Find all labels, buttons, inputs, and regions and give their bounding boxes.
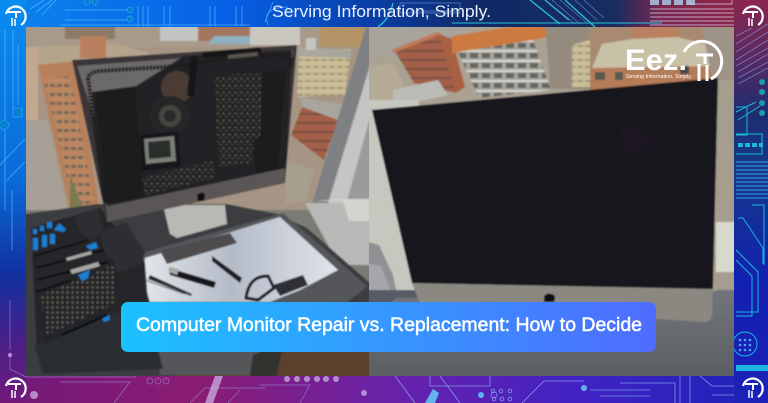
brand logo: Eez: Eez. [625,44,687,77]
corner logo: bottom left [6,379,26,398]
brand logo: Eez: Serving Information, Simply. [626,74,692,80]
photo: front of monitor with black screen [360,20,742,384]
title banner [121,302,656,352]
title banner: Computer Monitor Repair vs. Replacement: How to Decide [136,315,642,336]
corner logo: bottom right [743,379,763,398]
corner logo: top left [6,7,26,26]
brand logo: Eez [625,41,722,81]
corner logo: top right [743,7,763,26]
photo: disassembled monitor and repair tools [18,20,378,384]
header tagline: Serving Information, Simply. [272,2,491,21]
